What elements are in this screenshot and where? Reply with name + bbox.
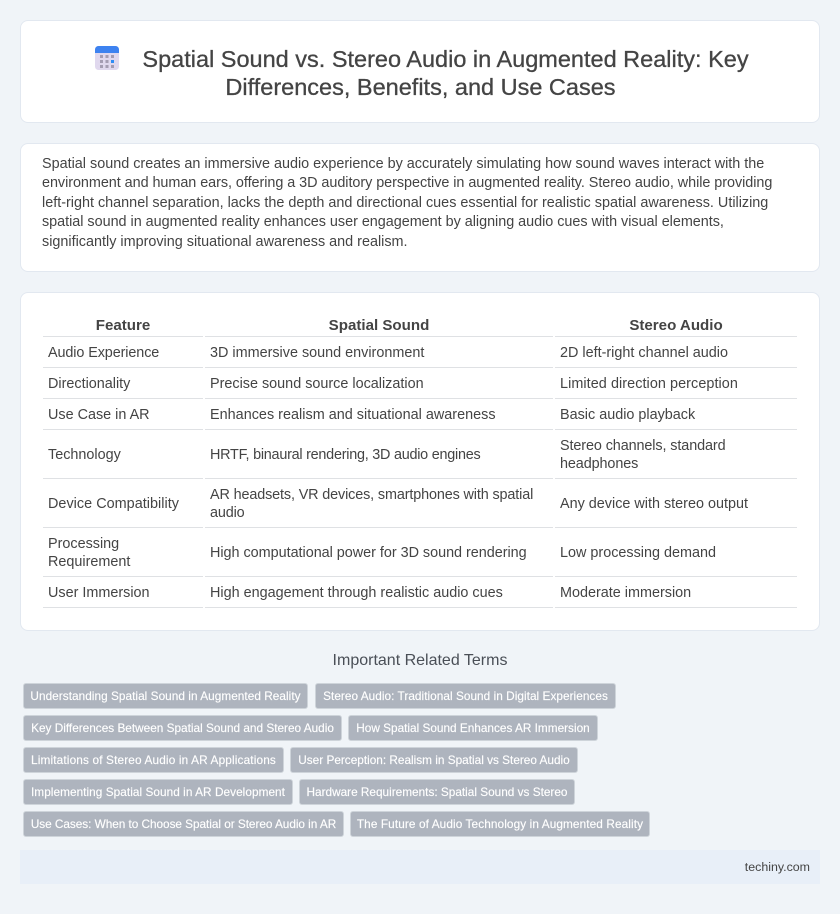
related term tags: The Future of Audio Technology in Augmented Reality xyxy=(357,817,643,831)
comparison table: Requirement xyxy=(48,554,130,570)
related terms heading: Important Related Terms xyxy=(333,652,507,669)
comparison table xyxy=(43,317,797,608)
comparison table: Spatial Sound xyxy=(329,317,429,334)
comparison table: HRTF, binaural rendering, 3D audio engines xyxy=(210,447,480,463)
title xyxy=(142,46,749,100)
related term tags: Implementing Spatial Sound in AR Development xyxy=(31,785,285,799)
intro paragraph: left-right channel separation, lacks the depth and directional cues essential for realistic spatial awareness. Utilizing xyxy=(42,195,768,211)
header panel xyxy=(20,20,820,123)
comparison table: 2D left-right channel audio xyxy=(560,345,728,361)
comparison table: Any device with stereo output xyxy=(560,496,748,512)
text: Spatial Sound vs. Stereo Audio in Augmented Reality: Key xyxy=(142,46,749,72)
comparison table: Basic audio playback xyxy=(560,407,695,423)
comparison table: Limited direction perception xyxy=(560,376,738,392)
comparison table: Stereo channels, standard xyxy=(560,438,726,454)
related term tags: Stereo Audio: Traditional Sound in Digital Experiences xyxy=(323,689,608,703)
footer bar xyxy=(20,850,820,884)
related term tags: Limitations of Stereo Audio in AR Applications xyxy=(31,753,276,767)
comparison table: Stereo Audio xyxy=(629,317,723,334)
comparison table: Moderate immersion xyxy=(560,585,691,601)
related term tags: Hardware Requirements: Spatial Sound vs Stereo xyxy=(306,785,567,799)
related term tags: How Spatial Sound Enhances AR Immersion xyxy=(356,721,590,735)
related term tags: Understanding Spatial Sound in Augmented Reality xyxy=(30,689,301,703)
intro text panel xyxy=(20,143,820,272)
comparison table: Processing xyxy=(48,536,119,552)
related term tags xyxy=(23,683,650,837)
intro paragraph: Spatial sound creates an immersive audio experience by accurately simulating how sound waves interact with the xyxy=(42,156,764,172)
related term tags: Key Differences Between Spatial Sound and Stereo Audio xyxy=(31,721,334,735)
comparison table: Device Compatibility xyxy=(48,496,179,512)
comparison table: headphones xyxy=(560,456,638,472)
intro paragraph xyxy=(42,156,772,250)
comparison table: AR headsets, VR devices, smartphones with spatial xyxy=(210,487,533,503)
text: Differences, Benefits, and Use Cases xyxy=(225,74,616,100)
intro paragraph: spatial sound in augmented reality enhances user engagement by aligning audio cues with visual elements, xyxy=(42,214,724,230)
intro paragraph: significantly improving situational awareness and realism. xyxy=(42,234,408,250)
comparison table: Use Case in AR xyxy=(48,407,150,423)
comparison table: Precise sound source localization xyxy=(210,376,424,392)
comparison table: Audio Experience xyxy=(48,345,159,361)
comparison table: User Immersion xyxy=(48,585,150,601)
related term tags: User Perception: Realism in Spatial vs Stereo Audio xyxy=(298,753,570,767)
comparison table: Enhances realism and situational awareness xyxy=(210,407,496,423)
footer site name: techiny.com xyxy=(745,860,810,874)
comparison table: Directionality xyxy=(48,376,130,392)
comparison table panel xyxy=(20,292,820,631)
comparison table: Low processing demand xyxy=(560,545,716,561)
intro paragraph: environment and human ears, offering a 3D auditory perspective in augmented reality. Stereo audio, while providing xyxy=(42,175,772,191)
comparison table: audio xyxy=(210,505,245,521)
related term tags: Use Cases: When to Choose Spatial or Stereo Audio in AR xyxy=(31,817,336,831)
comparison table: Technology xyxy=(48,447,121,463)
comparison table: Feature xyxy=(96,317,150,334)
icon: calendar grid xyxy=(95,46,119,70)
comparison table: High engagement through realistic audio cues xyxy=(210,585,503,601)
comparison table: 3D immersive sound environment xyxy=(210,345,424,361)
comparison table: High computational power for 3D sound rendering xyxy=(210,545,527,561)
